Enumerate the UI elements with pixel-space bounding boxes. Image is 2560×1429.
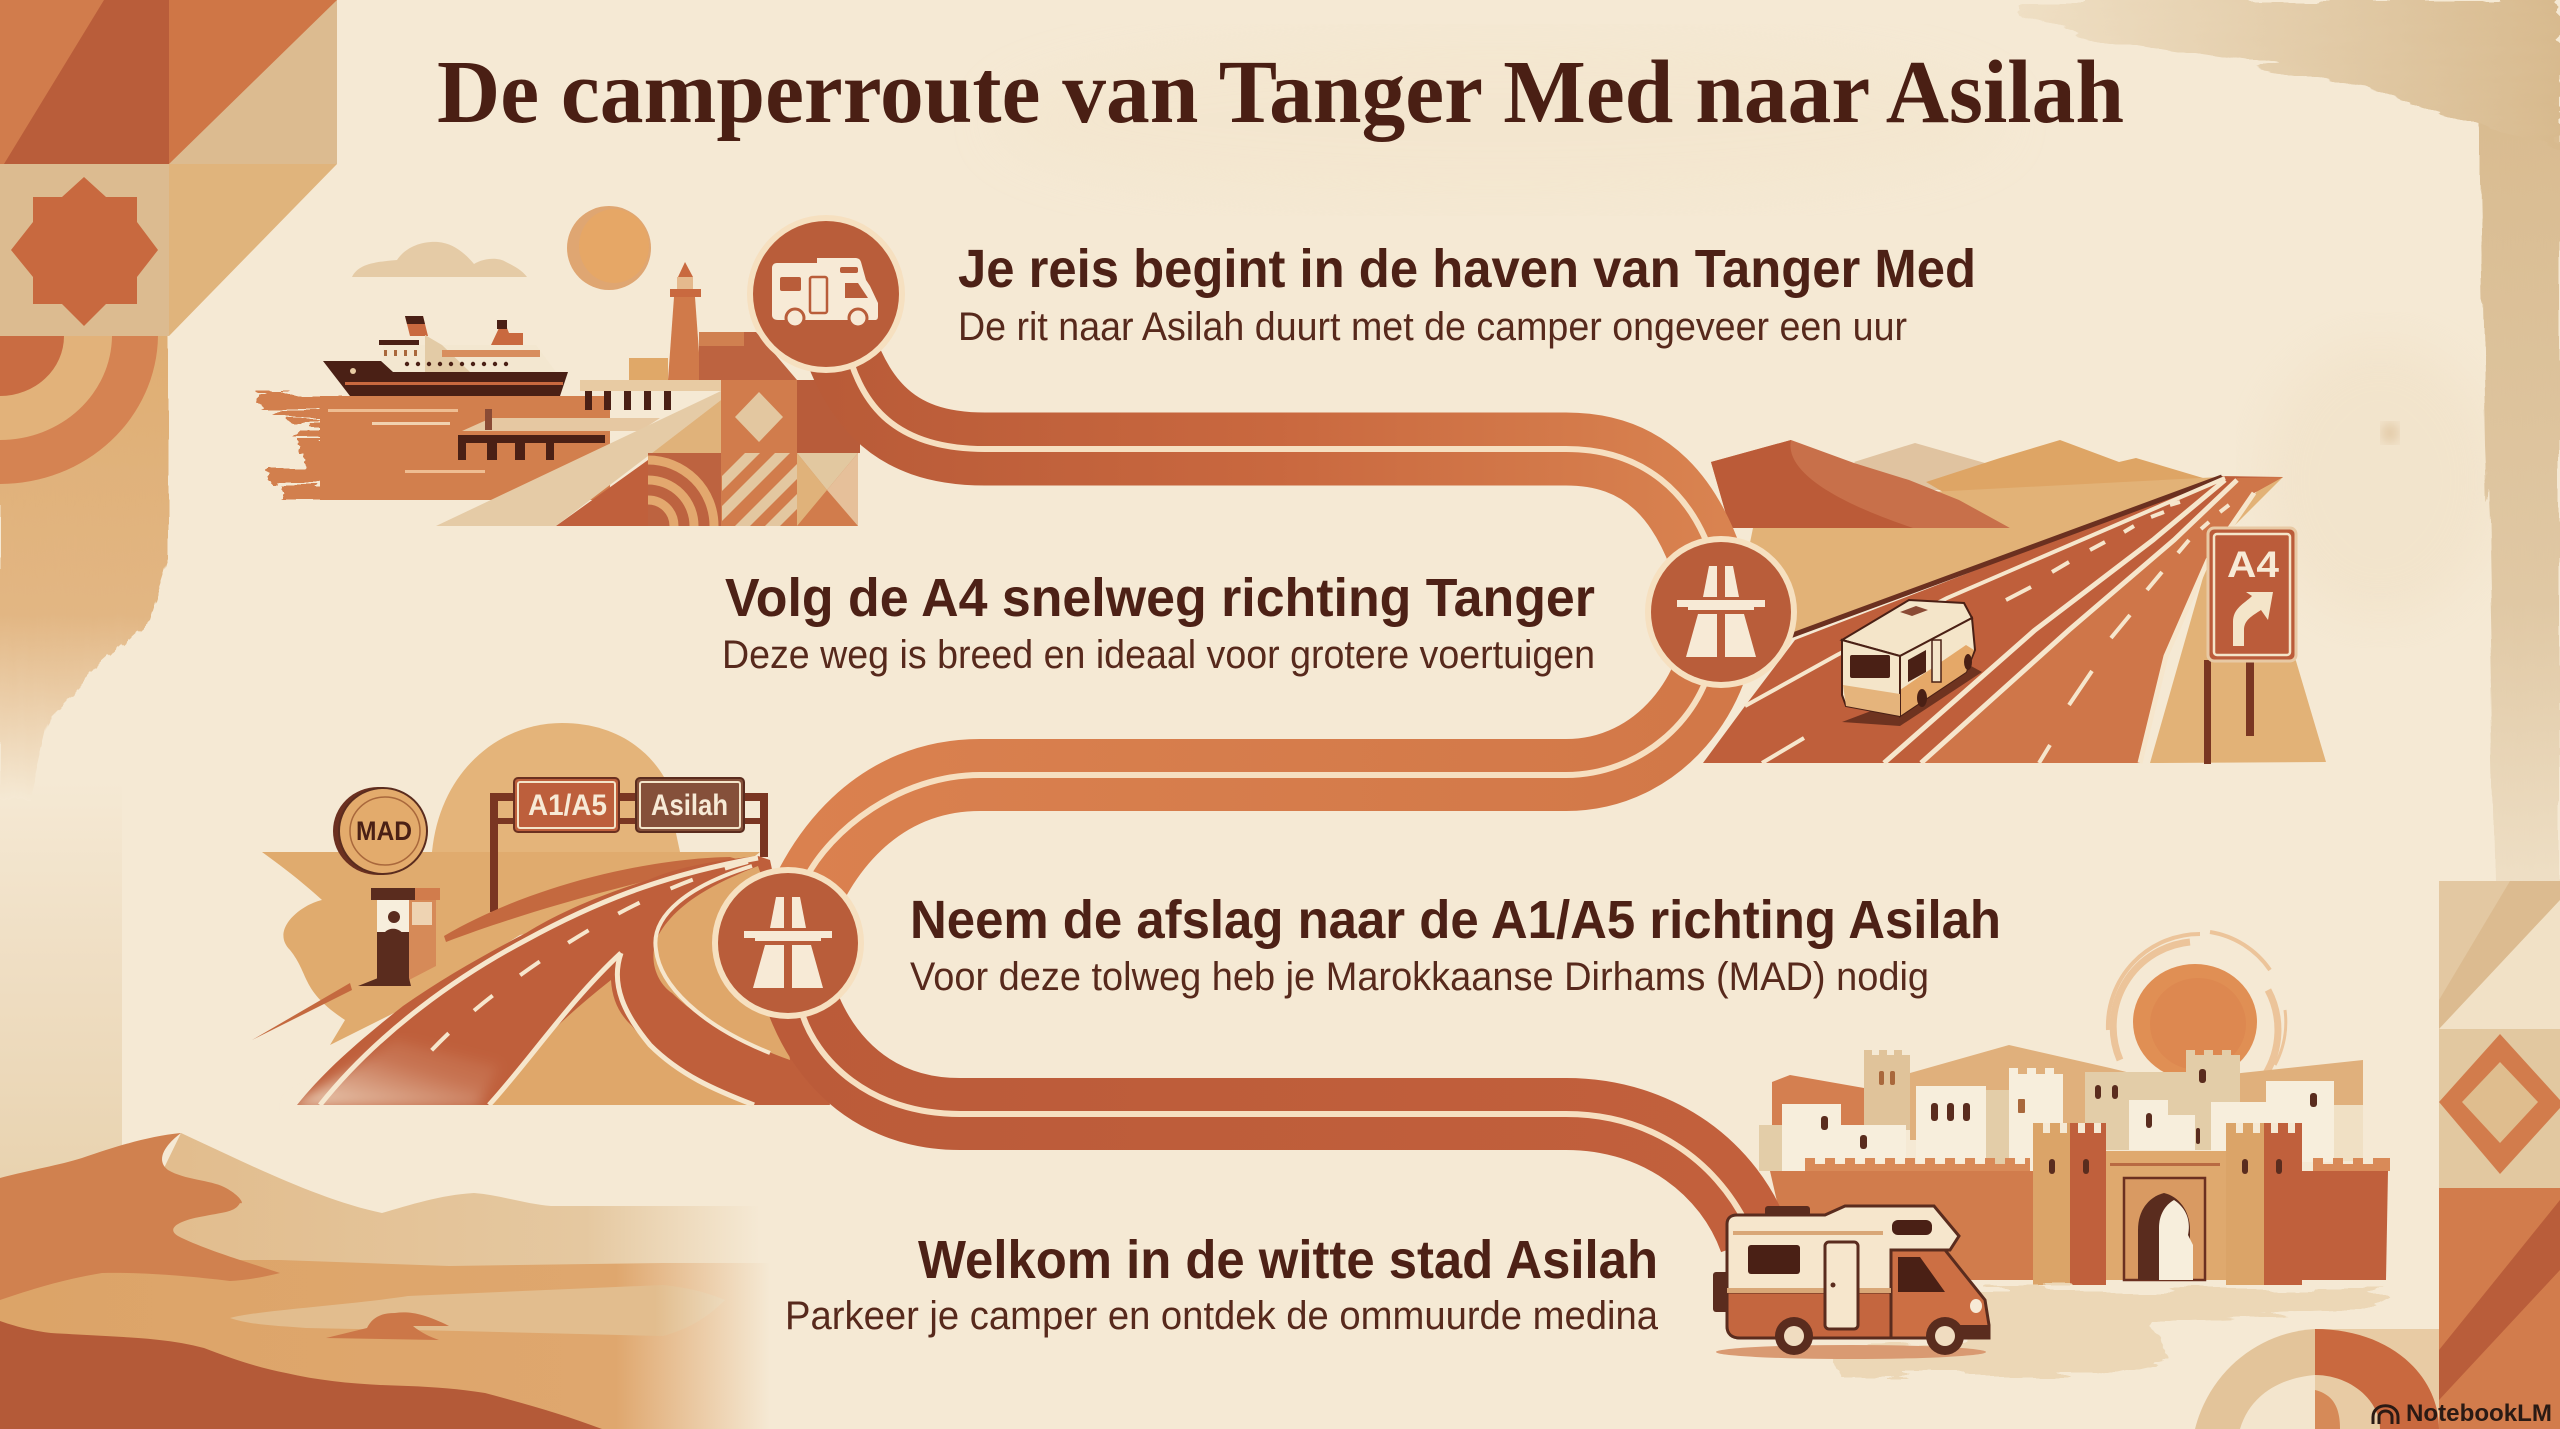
icon: cloud	[352, 242, 527, 277]
road surface	[1703, 476, 2326, 763]
distant hills	[1772, 1045, 2363, 1140]
step 3 text: Voor deze tolweg heb je Marokkaanse Dirhams (MAD) nodig	[910, 955, 1929, 999]
sign: Asilah	[636, 778, 744, 832]
medina wall	[1770, 1158, 2390, 1280]
segment 3	[788, 943, 1755, 1240]
sea	[258, 396, 610, 500]
step 4 text: Parkeer je camper en ontdek de ommuurde medina	[785, 1294, 1659, 1338]
step 4 icon: large camper	[1713, 1206, 1990, 1359]
sign: Asilah: Asilah	[651, 789, 728, 822]
ship	[323, 316, 568, 396]
icon: road camper	[1842, 600, 1982, 726]
roads and ramp	[252, 856, 830, 1125]
step 1 text	[958, 239, 1976, 349]
logo: NotebookLM: NotebookLM	[2406, 1400, 2552, 1427]
step 1 text: Je reis begint in de haven van Tanger Med	[958, 239, 1976, 299]
step 2 text: Deze weg is breed en ideaal voor grotere voertuigen	[722, 633, 1595, 677]
step 1 marker: camper in circle	[747, 215, 905, 373]
mosaic tiles	[436, 380, 860, 526]
icon: A4 road sign	[2204, 528, 2296, 764]
step 3 text	[910, 890, 2001, 999]
segment 1	[826, 300, 1721, 612]
panel: bottom-right geometric tiles	[2195, 881, 2560, 1429]
scene: A4 motorway	[1703, 440, 2326, 764]
ground and dome	[262, 723, 760, 1045]
icon: MAD coin: MAD	[356, 816, 412, 846]
panel: bottom-left desert dunes	[0, 1133, 770, 1429]
step 2 text	[722, 568, 1595, 677]
segment 2	[788, 612, 1721, 943]
panel: top-left geometric tiles	[0, 0, 337, 800]
scene: port of Tanger Med	[258, 206, 860, 526]
scene: toll road and A1/A5 exit	[252, 723, 830, 1125]
lighthouse	[668, 262, 701, 380]
step 4 text	[785, 1230, 1659, 1338]
step 3 text: Neem de afslag naar de A1/A5 richting Asilah	[910, 890, 2001, 950]
icon: toll booth	[358, 888, 440, 986]
hill and harbour blocks	[699, 332, 797, 380]
title: De camperroute van Tanger Med naar Asilah	[437, 43, 2124, 142]
step 1 text: De rit naar Asilah duurt met de camper ongeveer een uur	[958, 305, 1907, 349]
desert hills	[1711, 440, 2240, 690]
step 3 marker: motorway icon in circle	[712, 867, 864, 1019]
pier	[458, 409, 660, 460]
sign: A1/A5	[514, 778, 619, 832]
scene: Asilah medina	[1759, 932, 2390, 1376]
step 4 text: Welkom in de witte stad Asilah	[918, 1230, 1658, 1290]
step 2 text: Volg de A4 snelweg richting Tanger	[725, 568, 1595, 628]
warehouse columns	[585, 391, 671, 410]
icon: MAD coin	[333, 787, 427, 875]
gate and towers	[2033, 1123, 2302, 1285]
step 2 marker: motorway icon in circle	[1645, 536, 1797, 688]
sandy path	[1830, 1290, 2390, 1376]
gantry	[490, 793, 768, 912]
sign: A1/A5: A1/A5	[528, 789, 607, 822]
icon: setting sun	[2108, 932, 2286, 1080]
icon: sun	[567, 206, 651, 290]
white houses	[1759, 1050, 2363, 1171]
icon: A4 road sign: A4	[2227, 544, 2279, 585]
route: winding road ribbon	[788, 300, 1755, 1240]
